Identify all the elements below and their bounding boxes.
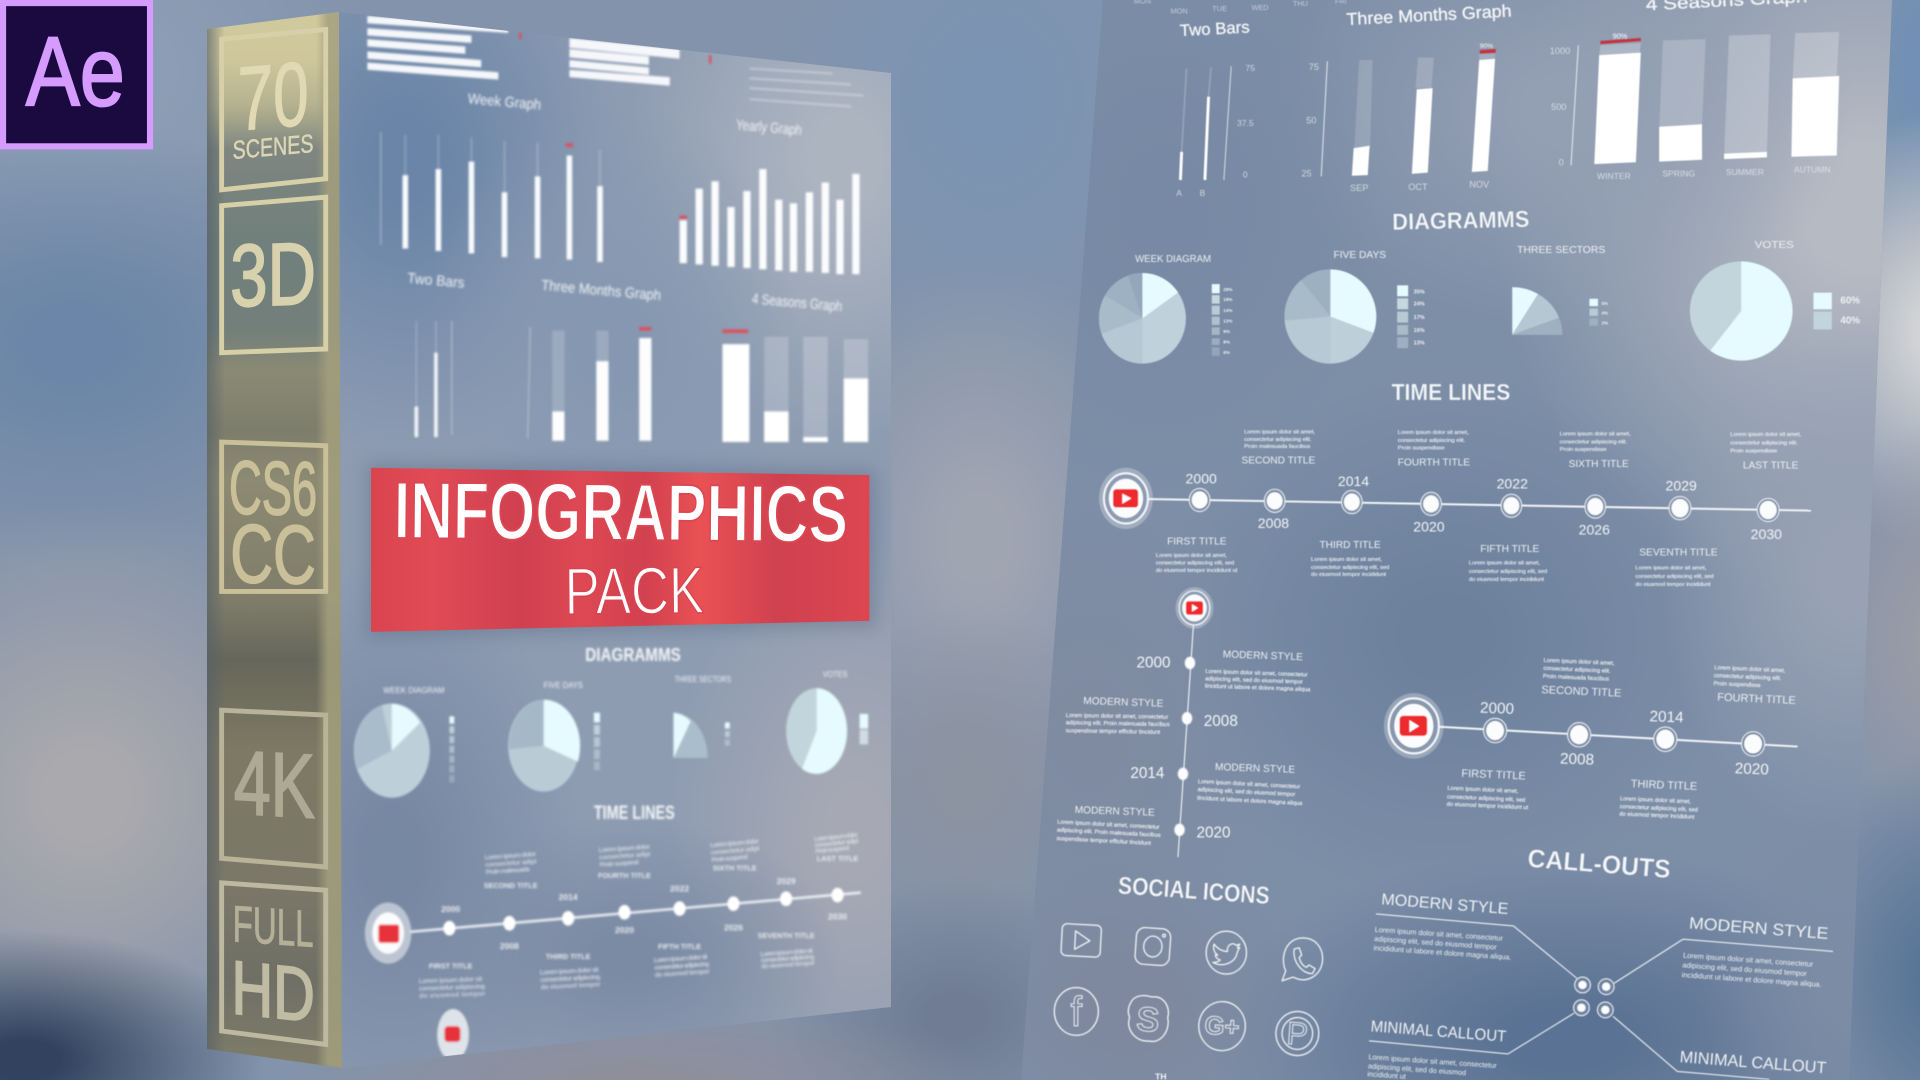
badge: Full HD: FULL [233, 894, 313, 958]
timeline: vertical: MODERN STYLE [1083, 696, 1164, 710]
callout: top left: adipiscing elit, sed do eiusmod tempor [1374, 934, 1498, 952]
callout: top right: MODERN STYLE [1688, 913, 1829, 943]
timeline text blocks: consectetur adipiscing elit, sed [1469, 569, 1547, 575]
legend: week diagram [1212, 284, 1233, 356]
legend: week diagram: 28% [1223, 287, 1233, 292]
pie legends [449, 713, 868, 782]
chart: four seasons: AUTUMN [1794, 165, 1831, 175]
pie 1 [354, 703, 430, 798]
timeline years: 2029 [1666, 477, 1697, 493]
blurred timeline: Lorem ipsum dolor [814, 832, 859, 843]
blurred timeline: FIRST TITLE [429, 962, 473, 971]
timeline: horizontal long [1099, 429, 1811, 588]
blurred timeline: consectetur adipi [485, 858, 537, 869]
timeline: vertical: Lorem ipsum dolor sit amet, consectetur [1057, 820, 1160, 831]
chart: three months: 90% [1480, 43, 1493, 50]
timeline: vertical: Lorem ipsum dolor sit amet, consectetur [1205, 669, 1308, 678]
callout: bottom right [1613, 1016, 1827, 1079]
banner: infographics pack: INFOGRAPHICS [393, 466, 848, 560]
icon: skype [1126, 995, 1170, 1043]
timeline: vertical: 2000 [1136, 654, 1170, 671]
timeline: vertical: MODERN STYLE [1215, 762, 1296, 776]
icon: play badge small [1176, 587, 1213, 629]
timeline: horizontal short: Proin malesuada faucibus [1543, 674, 1609, 683]
timeline text blocks: Proin suspendisse [1730, 448, 1777, 454]
badge: 3D [222, 197, 326, 353]
blurred chart content on box front [354, 16, 868, 1060]
timeline: horizontal short: Lorem ipsum dolor sit amet, [1543, 658, 1615, 667]
icon: youtube [1061, 923, 1102, 957]
legend: week diagram: 9% [1223, 329, 1230, 334]
blurred timeline: do eiusmod tempor [419, 991, 486, 1000]
badge: 4K [222, 710, 326, 867]
badge: CS6 CC [222, 442, 326, 602]
blurred timeline: consectetur adipiscing [654, 961, 709, 972]
callout: bottom left: adipiscing elit, sed do eiusmod [1368, 1061, 1466, 1077]
callout nodes [1573, 977, 1614, 1018]
timeline text blocks: consectetur adipiscing elit, sed [1156, 560, 1234, 566]
timeline: horizontal short: Lorem ipsum dolor sit amet, [1620, 796, 1691, 805]
callout: top right: adipiscing elit, sed do eiusmod tempor [1682, 960, 1808, 978]
chart: two bars: 75 [1245, 63, 1255, 73]
timeline: vertical [1056, 587, 1312, 857]
legend: votes: 40% [1840, 315, 1860, 326]
callout: top left: MODERN STYLE [1381, 891, 1509, 918]
pie titles: VOTES [1755, 240, 1794, 251]
timeline: vertical: suspendisse tempor efficitur tincidunt [1066, 728, 1161, 736]
timeline years: 2022 [1497, 476, 1528, 492]
legend: votes: 60% [1840, 296, 1860, 307]
timeline: horizontal short: THIRD TITLE [1631, 778, 1697, 793]
blurred timeline: consectetur adipi [814, 838, 859, 849]
blurred timeline: FIFTH TITLE [658, 942, 701, 951]
diagramms heading: DIAGRAMMS [585, 644, 681, 665]
blurred timeline: consectetur adipiscing [540, 974, 600, 984]
icon: google plus [1197, 1000, 1247, 1052]
timeline titles: LAST TITLE [1743, 461, 1799, 472]
timeline: horizontal short: 2020 [1735, 760, 1769, 778]
timeline text blocks: Proin suspendisse [1398, 445, 1445, 451]
icon: google plus: G+ [1204, 1012, 1240, 1042]
chart: four seasons [1550, 32, 1839, 181]
time lines heading: TIME LINES [594, 802, 675, 824]
timeline titles: FIFTH TITLE [1480, 544, 1540, 555]
timeline: horizontal short: Lorem ipsum dolor sit amet, [1447, 786, 1519, 795]
yearly graph title: Yearly Graph [735, 117, 803, 139]
icon: facebook: f [1071, 988, 1083, 1035]
heading: diagramms: DIAGRAMMS [1392, 206, 1530, 235]
timeline titles: SECOND TITLE [1241, 456, 1315, 467]
four seasons chart [722, 329, 868, 442]
timeline years: 2000 [1186, 471, 1217, 487]
blurred chart content on box front: 4 Seasons Graph [751, 291, 843, 315]
heading: two bars: Two Bars [1179, 17, 1250, 40]
pie: three sectors [1512, 287, 1562, 335]
legend: three sectors: 4% [1602, 311, 1608, 316]
callout: top left: Lorem ipsum dolor sit amet, consectetur [1375, 925, 1504, 943]
chart: three months: OCT [1408, 182, 1428, 192]
banner: infographics pack: PACK [564, 554, 704, 629]
timeline: horizontal short: 2000 [1480, 700, 1514, 718]
weekday axis labels: MON [1171, 6, 1188, 15]
blurred timeline: 2022 [670, 883, 689, 893]
timeline text blocks: do eiusmod tempor incididunt [1311, 572, 1387, 578]
chart: four seasons: SPRING [1662, 168, 1696, 178]
timeline: horizontal short: 2008 [1560, 750, 1594, 769]
blurred timeline [365, 832, 861, 1060]
timeline text blocks: consectetur adipiscing elit. [1398, 438, 1466, 444]
blurred timeline: 2020 [615, 925, 634, 935]
blurred chart content on box front: VOTES [823, 669, 848, 679]
chart: three months: 50 [1306, 116, 1317, 126]
timeline text blocks: Proin suspendisse [1560, 447, 1607, 453]
blurred timeline: do eiusmod tempor [761, 960, 816, 971]
timeline text blocks: Lorem ipsum dolor sit amet, [1244, 429, 1315, 435]
timeline titles: SEVENTH TITLE [1639, 548, 1718, 559]
pie titles [1135, 240, 1794, 265]
blurred timeline: Proin suspend [815, 845, 850, 855]
callout: bottom left [1367, 1013, 1574, 1080]
chart: two bars: 0 [1243, 170, 1248, 180]
timeline: horizontal short: consectetur adipiscing elit, sed [1620, 804, 1698, 814]
chart: three months [1301, 43, 1496, 193]
week graph tracks [405, 135, 600, 192]
box side panel [207, 12, 342, 1068]
timeline text blocks: consectetur adipiscing elit, sed [1635, 574, 1714, 580]
chart: four seasons: 0 [1559, 157, 1564, 167]
blurred timeline: THIRD TITLE [546, 952, 591, 961]
timeline text blocks: Lorem ipsum dolor sit amet, [1730, 432, 1802, 438]
timeline titles: SIXTH TITLE [1569, 459, 1629, 470]
poster content [1054, 0, 1860, 1080]
chart: two bars: 37.5 [1237, 118, 1254, 128]
icon: play badge [1099, 468, 1153, 529]
timeline: horizontal short: consectetur adipiscing elit, sed [1447, 794, 1525, 804]
pie titles: WEEK DIAGRAM [1135, 254, 1211, 265]
legend: five days: 35% [1414, 289, 1425, 295]
right poster panel [1024, 0, 1892, 1080]
legend: week diagram: 8% [1223, 339, 1230, 344]
icon: twitter [1206, 931, 1247, 974]
timeline titles: THIRD TITLE [1319, 540, 1381, 551]
box front panel [339, 12, 891, 1057]
icon: skype: S [1135, 1000, 1161, 1040]
timeline: horizontal short: do eiusmod tempor incididunt ut [1447, 802, 1529, 811]
timeline years [1186, 471, 1782, 542]
blurred timeline: 2000 [441, 904, 460, 914]
timeline: vertical: 2020 [1196, 825, 1230, 842]
legend: five days: 17% [1414, 315, 1425, 321]
legend: three sectors: 2% [1602, 320, 1608, 325]
timeline years: 2014 [1338, 473, 1369, 489]
timeline text blocks: consectetur adipiscing elit, sed [1311, 565, 1389, 571]
icon: facebook [1054, 988, 1098, 1035]
weekday axis labels: WED [1251, 3, 1269, 12]
callout: bottom right: MINIMAL CALLOUT [1679, 1047, 1827, 1077]
chart: three months: 25 [1301, 168, 1312, 178]
timeline titles: FOURTH TITLE [1398, 457, 1470, 468]
badge: 70 scenes: 70 [238, 43, 309, 150]
timeline text blocks: Lorem ipsum dolor sit amet, [1469, 560, 1540, 566]
three months chart [552, 327, 651, 441]
legend: week diagram: 18% [1223, 297, 1233, 302]
icon: play badge large [1384, 693, 1444, 759]
timeline: horizontal short: consectetur adipiscing elit. [1714, 673, 1782, 682]
badge: 3D: 3D [230, 223, 316, 325]
yearly graph bars [683, 169, 856, 274]
timeline years: 2030 [1751, 526, 1782, 542]
chart: three months: NOV [1469, 179, 1490, 189]
timeline: vertical: adipiscing elit. Proin malesuada faucibus [1057, 827, 1161, 839]
badge: CS6 CC: CS6 [229, 446, 317, 532]
blurred timeline: SECOND TITLE [484, 881, 538, 890]
heading: social icons: SOCIAL ICONS [1117, 873, 1270, 910]
blurred timeline: 2030 [828, 912, 847, 922]
blurred timeline: Lorem ipsum dolor sit [419, 976, 483, 985]
callout: bottom left: MINIMAL CALLOUT [1370, 1018, 1507, 1046]
second row titles: Two Bars [406, 271, 465, 292]
legend: week diagram: 14% [1223, 308, 1233, 313]
blurred timeline: LAST TITLE [817, 854, 858, 863]
timeline: vertical: 2008 [1204, 713, 1238, 730]
timeline: horizontal short: SECOND TITLE [1541, 684, 1622, 700]
banner: infographics pack [371, 466, 869, 632]
pie 3 [673, 713, 708, 758]
legend: five days: 13% [1414, 341, 1425, 347]
chart: three months: 75 [1309, 62, 1319, 72]
callout: top left [1373, 891, 1577, 978]
timeline: vertical: 2014 [1130, 765, 1165, 782]
timeline: horizontal short [1384, 658, 1798, 821]
blurred timeline: 2008 [500, 941, 519, 951]
timeline text blocks: Lorem ipsum dolor sit amet, [1560, 431, 1631, 437]
timeline: horizontal short: do eiusmod tempor incididunt [1619, 811, 1695, 821]
blurred timeline: Proin suspend [599, 859, 639, 869]
timeline: horizontal short: Lorem ipsum dolor sit amet, [1714, 665, 1786, 674]
pie titles: THREE SECTORS [1517, 245, 1606, 256]
chart: three months: SEP [1350, 183, 1368, 193]
legend: three sectors [1589, 299, 1608, 326]
badge: Full HD [222, 883, 326, 1044]
blurred timeline: consectetur adipi [710, 845, 760, 857]
badge: 4K: 4K [234, 732, 315, 838]
chart: two bars [1176, 63, 1255, 198]
timeline: vertical: Lorem ipsum dolor sit amet, consectetur [1066, 713, 1168, 721]
legend: week diagram: 6% [1223, 350, 1230, 355]
timeline text blocks [1156, 429, 1802, 588]
After Effects badge [3, 3, 150, 146]
timeline text blocks: do eiusmod tempor incididunt [1635, 582, 1711, 588]
weekday axis labels: TUE [1212, 4, 1227, 13]
horizontal bar charts [367, 16, 711, 86]
pie: five days [1284, 269, 1376, 364]
timeline text blocks: Lorem ipsum dolor sit amet, [1156, 553, 1227, 559]
chart: two bars: A [1176, 188, 1182, 198]
After Effects badge: Ae [26, 16, 125, 126]
timeline: vertical: MODERN STYLE [1074, 805, 1155, 819]
blurred timeline: consectetur adipiscing [419, 983, 485, 993]
chart: four seasons: WINTER [1597, 171, 1631, 181]
blurred timeline: SIXTH TITLE [713, 864, 757, 873]
timeline text blocks: Lorem ipsum dolor sit amet, [1635, 565, 1707, 571]
pie 2 [508, 700, 580, 792]
timeline: vertical: tincidunt ut labore et dolore magna aliqua [1205, 684, 1311, 693]
timeline: horizontal short: consectetur adipiscing elit. [1543, 666, 1611, 675]
timeline: vertical: tincidunt ut labore et dolore magna aliqua [1197, 796, 1303, 807]
timeline: vertical: adipiscing elit, sed do eiusmod tempor [1205, 676, 1303, 686]
chart: four seasons: SUMMER [1726, 167, 1764, 177]
timeline text blocks: Proin malesuada faucibus [1244, 444, 1310, 450]
timeline titles [1167, 456, 1799, 559]
timeline: horizontal short: Proin suspendisse [1713, 681, 1761, 689]
week graph title: Week Graph [467, 91, 542, 114]
chart: four seasons: 1000 [1550, 46, 1570, 56]
week graph bars [405, 156, 600, 262]
blurred timeline: SEVENTH TITLE [758, 931, 815, 940]
blurred timeline: Lorem ipsum dolor [710, 838, 760, 849]
timeline: vertical: Lorem ipsum dolor sit amet, consectetur [1198, 779, 1300, 790]
blurred timeline: Proin malesuada [486, 866, 530, 876]
blurred timeline: 2029 [777, 876, 796, 886]
blurred chart content on box front: THREE SECTORS [675, 674, 731, 684]
timeline: vertical: suspendisse tempor efficitur tincidunt [1056, 836, 1151, 847]
icon: pinterest [1274, 1010, 1320, 1057]
blurred chart content on box front: Three Months Graph [541, 278, 662, 304]
pie titles: WEEK DIAGRAM [383, 685, 444, 695]
blurred timeline: consectetur adipi [599, 851, 651, 862]
blurred timeline: 2014 [559, 892, 578, 902]
timeline: horizontal short: FIRST TITLE [1461, 768, 1526, 783]
timeline text blocks: Lorem ipsum dolor sit amet, [1398, 430, 1469, 436]
callout: bottom left: Lorem ipsum dolor sit amet, consectetur [1368, 1052, 1498, 1070]
callout: top right: incididunt ut labore et dolore magna aliqua. [1681, 970, 1822, 989]
badge: Full HD: HD [231, 945, 315, 1039]
icon: pinterest: P [1285, 1015, 1309, 1052]
timeline text blocks: Lorem ipsum dolor sit amet, [1311, 557, 1382, 563]
legend: five days: 24% [1414, 302, 1425, 308]
badge: 70 scenes [222, 29, 326, 190]
timeline text blocks: consectetur adipiscing elit. [1560, 439, 1627, 445]
timeline text blocks: consectetur adipiscing elit. [1730, 440, 1798, 446]
blurred timeline: Lorem ipsum dolor sit [760, 948, 814, 958]
timeline titles: FIRST TITLE [1167, 536, 1227, 547]
heading: three months graph: Three Months Graph [1346, 1, 1512, 29]
legend: week diagram: 12% [1223, 319, 1233, 324]
blurred timeline: 2026 [724, 923, 743, 933]
timeline: vertical: adipiscing elit. Proin malesuada faucibus [1066, 720, 1170, 728]
timeline years: 2026 [1579, 521, 1610, 537]
timeline: vertical: MODERN STYLE [1223, 649, 1303, 663]
badge: CS6 CC: CC [230, 507, 316, 602]
pie titles: FIVE DAYS [1333, 250, 1386, 261]
pie: week diagram [1099, 273, 1186, 364]
timeline text blocks: consectetur adipiscing elit. [1244, 437, 1312, 443]
weekday axis labels [1134, 0, 1347, 15]
badge: 70 scenes: SCENES [233, 130, 313, 165]
timeline text blocks: do eiusmod tempor incididunt ut [1156, 568, 1238, 574]
blurred timeline: FOURTH TITLE [598, 871, 651, 880]
heading: time lines: TIME LINES [1392, 379, 1510, 405]
legend: three sectors: 5% [1602, 301, 1608, 306]
blurred timeline: Lorem ipsum dolor [598, 844, 651, 854]
timeline years: 2008 [1258, 515, 1289, 531]
timeline: horizontal short: FOURTH TITLE [1717, 692, 1796, 707]
heading: call-outs: CALL-OUTS [1527, 845, 1672, 884]
legend: five days [1397, 285, 1425, 348]
blurred timeline: Lorem ipsum dolor sit [654, 954, 709, 964]
chart: four seasons: 500 [1551, 102, 1566, 112]
blurred timeline: Lorem ipsum dolor sit [540, 967, 600, 977]
chart: four seasons: 90% [1613, 32, 1628, 41]
pie 4 [786, 688, 847, 774]
callout: top right [1614, 913, 1833, 989]
icon: whatsapp [1282, 938, 1323, 981]
blurred timeline: do eiusmod tempor [541, 981, 601, 991]
timeline: horizontal short: 2014 [1649, 708, 1684, 726]
legend: votes [1813, 293, 1860, 329]
blurred chart content on box front: FIVE DAYS [544, 680, 583, 690]
pie: votes [1690, 261, 1793, 361]
chart: two bars: B [1200, 188, 1206, 198]
callout: top left: incididunt ut labore et dolore magna aliqua. [1373, 943, 1512, 962]
two bars chart [416, 321, 530, 438]
blurred timeline: consectetur adipiscing [760, 954, 815, 964]
timeline text blocks: do eiusmod tempor incididunt [1469, 577, 1544, 583]
blurred timeline: do eiusmod tempor [655, 968, 710, 979]
timeline: vertical: adipiscing elit, sed do eiusmod tempor [1197, 787, 1295, 798]
callout: top right: Lorem ipsum dolor sit amet, consectetur [1683, 951, 1814, 969]
timeline years: 2020 [1413, 518, 1445, 534]
icon: instagram [1134, 927, 1171, 966]
blurred timeline: Proin suspend [711, 854, 748, 864]
legend: five days: 16% [1414, 328, 1425, 334]
banner shadow [367, 463, 877, 637]
blurred timeline: Lorem ipsum dolor [485, 851, 537, 862]
